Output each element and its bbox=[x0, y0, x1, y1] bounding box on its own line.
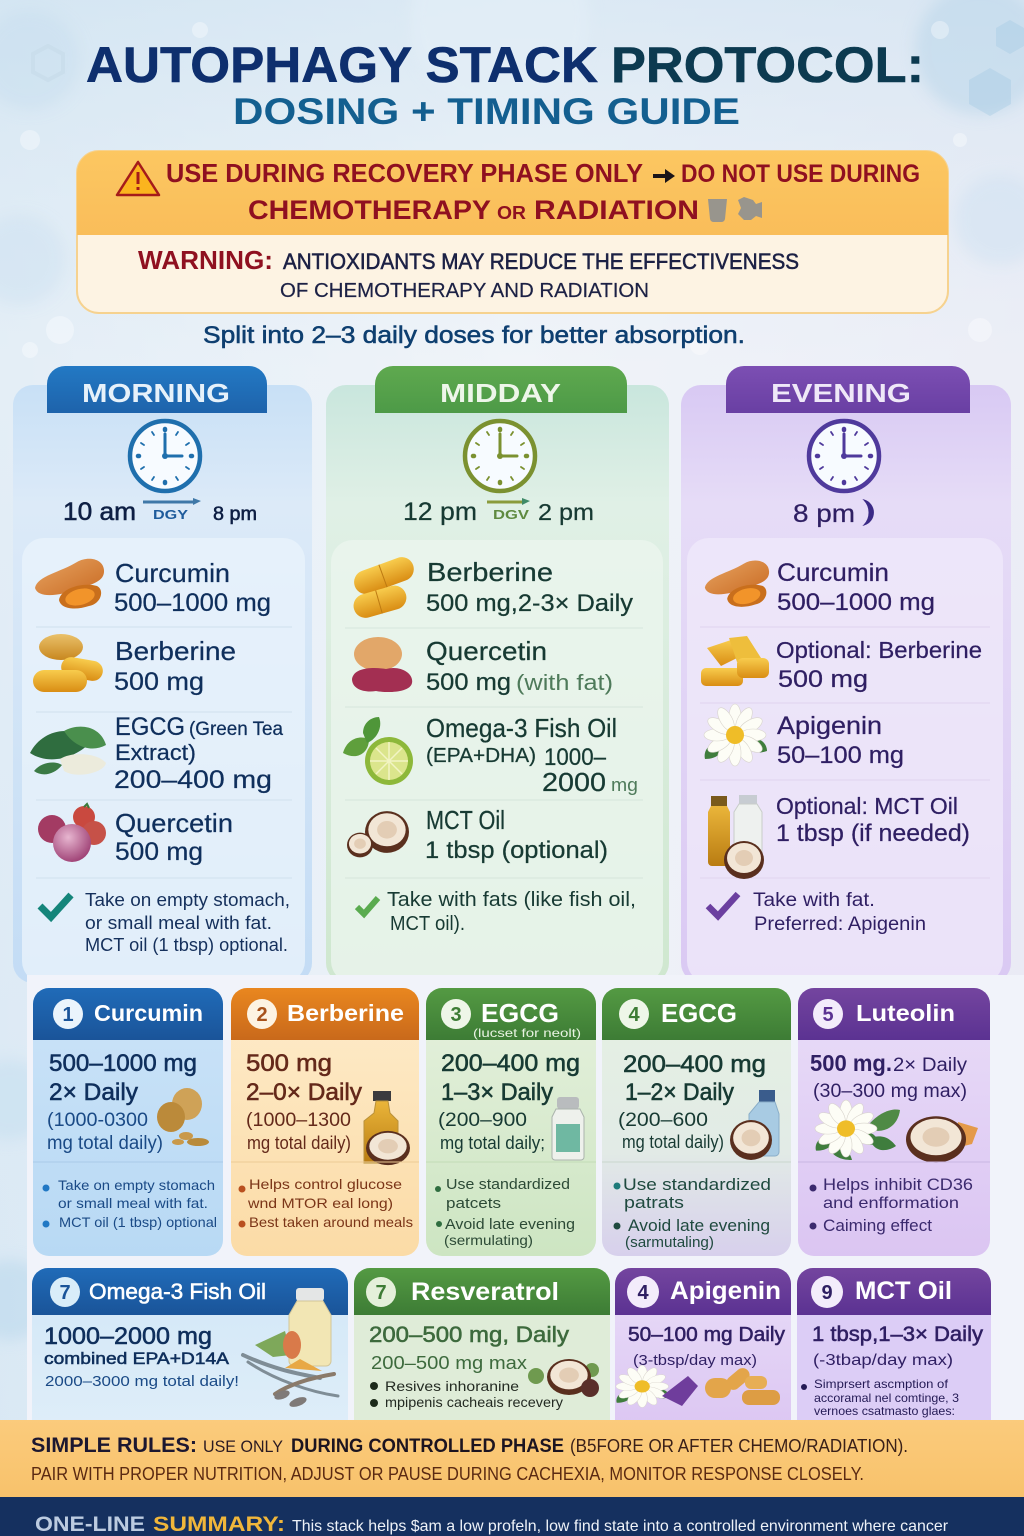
dose: 200–500 mg max bbox=[371, 1353, 527, 1373]
dose: mg total daily) bbox=[622, 1132, 724, 1152]
warning headline: DO NOT USE DURING bbox=[681, 160, 920, 188]
one-line summary band: SUMMARY: bbox=[153, 1513, 285, 1536]
warning banner bbox=[77, 151, 948, 313]
one-line summary band: This stack helps $am a low profeln, low find state into a controlled environment where cancer bbox=[292, 1518, 949, 1535]
evening time with moon: 8 pm bbox=[793, 500, 855, 528]
card title: Luteolin bbox=[856, 1000, 955, 1026]
midday instructions: MCT oil). bbox=[390, 913, 465, 935]
item: quercetin bbox=[115, 808, 233, 866]
warning headline: RADIATION bbox=[534, 195, 699, 225]
icon: morning clock bbox=[130, 421, 200, 491]
badge 5: 5 bbox=[822, 1004, 834, 1026]
title bbox=[86, 37, 924, 132]
panel: evening bbox=[681, 366, 1011, 983]
card: curcumin bbox=[33, 988, 223, 1256]
item: berberine: Berberine bbox=[427, 557, 553, 587]
badge 7: 7 bbox=[59, 1282, 71, 1304]
icon: midday clock bbox=[465, 421, 535, 491]
warning text bbox=[138, 245, 799, 302]
warning headline: OR bbox=[497, 203, 526, 223]
notes: Use standardized bbox=[446, 1176, 570, 1193]
badge 1 bbox=[53, 999, 83, 1029]
icon: coconut bbox=[347, 811, 409, 857]
dose: mg total daily) bbox=[247, 1133, 351, 1153]
item: curcumin: Curcumin bbox=[777, 559, 889, 587]
badge 2 bbox=[247, 999, 277, 1029]
badge 4: 4 bbox=[637, 1282, 649, 1304]
notes: Caiming effect bbox=[823, 1216, 932, 1235]
item: egcg: 200–400 mg bbox=[114, 766, 272, 794]
notes: or small meal with fat. bbox=[58, 1195, 208, 1211]
morning instructions: Take on empty stomach, bbox=[85, 890, 290, 910]
dose: (1000-0300 bbox=[47, 1110, 148, 1131]
icon: lime and leaves bbox=[343, 717, 413, 785]
notes bbox=[238, 1176, 413, 1230]
notes: MCT oil (1 tbsp) optional bbox=[59, 1214, 217, 1230]
dose: 200–400 mg bbox=[441, 1050, 580, 1077]
icon: quercetin bean bbox=[352, 637, 412, 692]
morning time range: 8 pm bbox=[213, 504, 257, 525]
card title: Resveratrol bbox=[411, 1278, 559, 1306]
dose bbox=[369, 1322, 569, 1373]
dose: (30–300 mg max) bbox=[813, 1081, 967, 1102]
item: curcumin bbox=[777, 559, 935, 616]
notes bbox=[435, 1176, 575, 1248]
notes: Helps control glucose bbox=[249, 1176, 402, 1192]
badge 3: 3 bbox=[450, 1004, 462, 1026]
card title: MCT Oil bbox=[855, 1277, 952, 1305]
item: optional mct oil bbox=[776, 793, 970, 847]
notes bbox=[42, 1177, 217, 1230]
badge 9: 9 bbox=[821, 1282, 833, 1304]
notes: and enfformation bbox=[823, 1195, 959, 1212]
notes: (sarmutaling) bbox=[625, 1234, 714, 1251]
card title: Apigenin bbox=[670, 1277, 781, 1305]
item: quercetin: Quercetin bbox=[426, 636, 547, 666]
item: omega-3 bbox=[426, 713, 638, 797]
dose: combined EPA+D14A bbox=[44, 1349, 230, 1368]
item: berberine bbox=[426, 557, 633, 617]
dose: 2000–3000 mg total daily! bbox=[45, 1373, 239, 1390]
item: apigenin: 50–100 mg bbox=[777, 742, 904, 769]
icon: turmeric bbox=[705, 561, 769, 607]
badge 7 bbox=[366, 1277, 396, 1307]
dose: 1–2× Daily bbox=[625, 1079, 734, 1106]
item: omega-3: 2000 bbox=[542, 767, 606, 797]
icon: coconut and peel bbox=[906, 1116, 978, 1163]
notes: Take on empty stomach bbox=[58, 1177, 215, 1193]
evening instructions: Take with fat. bbox=[753, 890, 875, 911]
item: berberine bbox=[114, 636, 236, 696]
icon: oil bottle and coconut bbox=[364, 1091, 410, 1165]
warning text: WARNING: bbox=[138, 245, 273, 275]
card: egcg powder bbox=[602, 988, 791, 1256]
dose: 500 mg bbox=[246, 1050, 332, 1077]
card: omega-3 fish oil bbox=[32, 1268, 348, 1438]
evening time with moon bbox=[793, 500, 873, 528]
item: omega-3: mg bbox=[611, 775, 638, 795]
icon: chemo cup and radiation device bbox=[708, 197, 762, 222]
notes: Helps inhibit CD36 bbox=[823, 1175, 973, 1194]
item: mct oil: MCT Oil bbox=[426, 805, 505, 835]
morning tab: MORNING bbox=[82, 378, 230, 408]
notes: Avoid late evening bbox=[628, 1216, 770, 1235]
supplement section backdrop bbox=[27, 975, 1024, 1421]
notes: (sermulating) bbox=[444, 1232, 533, 1248]
card title: Berberine bbox=[287, 1000, 404, 1026]
notes: Resives inhoranine bbox=[385, 1378, 519, 1394]
item: mct oil: 1 tbsp (optional) bbox=[425, 837, 608, 864]
item: quercetin: (with fat) bbox=[516, 670, 613, 695]
morning instructions: MCT oil (1 tbsp) optional. bbox=[85, 935, 288, 955]
notes: patcets bbox=[446, 1195, 501, 1212]
dose bbox=[438, 1050, 580, 1153]
icon: fish and citrus bbox=[243, 1331, 338, 1409]
icon: chamomile flower bbox=[704, 704, 767, 766]
card title bbox=[473, 998, 581, 1040]
card: egcg capsule bbox=[426, 988, 596, 1256]
notes: mpipenis cacheais recevery bbox=[385, 1394, 563, 1410]
icon: green check bbox=[357, 898, 378, 914]
card title: Omega-3 Fish Oil bbox=[89, 1279, 266, 1304]
panel: morning bbox=[13, 366, 312, 983]
icon: purple check bbox=[708, 894, 738, 916]
warning headline: USE DURING RECOVERY PHASE ONLY bbox=[166, 158, 643, 188]
dose: 50–100 mg Daily bbox=[628, 1324, 785, 1346]
dose: 2× Daily bbox=[49, 1079, 138, 1106]
midday tab: MIDDAY bbox=[440, 378, 561, 408]
badge 4 bbox=[619, 999, 649, 1029]
dose bbox=[47, 1050, 197, 1154]
simple rules band: (B5FORE OR AFTER CHEMO/RADIATION). bbox=[570, 1436, 908, 1456]
simple rules band bbox=[0, 1420, 1024, 1497]
item: berberine: 500 mg bbox=[114, 668, 204, 696]
midday time range bbox=[403, 498, 594, 526]
card title: Curcumin bbox=[94, 1000, 203, 1026]
icon: curcumin nuggets bbox=[157, 1088, 209, 1146]
midday time range: DGV bbox=[493, 507, 529, 522]
item: optional mct oil: 1 tbsp (if needed) bbox=[776, 820, 970, 847]
dose bbox=[628, 1324, 785, 1369]
icon: evening clock bbox=[809, 421, 879, 491]
panel: midday bbox=[326, 366, 669, 983]
icon: flower bbox=[815, 1100, 900, 1160]
dose: (1000–1300 bbox=[246, 1110, 351, 1131]
icon: flower and roots bbox=[616, 1365, 780, 1407]
item: quercetin: 500 mg bbox=[115, 838, 203, 866]
item: quercetin: 500 mg bbox=[426, 669, 511, 696]
item: curcumin bbox=[114, 558, 271, 617]
icon: blue bottle and coconut bbox=[730, 1090, 779, 1160]
card: mct oil bbox=[797, 1268, 991, 1438]
dose: mg total daily; bbox=[440, 1133, 545, 1153]
dose: 500–1000 mg bbox=[49, 1050, 197, 1077]
item: apigenin: Apigenin bbox=[777, 712, 882, 740]
icon: berberine bbox=[33, 634, 104, 692]
badge 7 bbox=[50, 1277, 80, 1307]
item: curcumin: 500–1000 mg bbox=[777, 589, 935, 616]
dose: 1–3× Daily bbox=[441, 1079, 553, 1106]
item: egcg: Extract) bbox=[115, 740, 196, 765]
card title: (lucset for neolt) bbox=[473, 1026, 581, 1040]
dose: (200–600 bbox=[618, 1110, 708, 1131]
card: apigenin bbox=[615, 1268, 791, 1438]
dose bbox=[810, 1050, 968, 1102]
evening instructions: Preferred: Apigenin bbox=[754, 914, 926, 935]
icon: onions bbox=[38, 804, 106, 862]
dosing note: Split into 2–3 daily doses for better absorption. bbox=[203, 322, 745, 349]
morning time range bbox=[63, 498, 257, 526]
icon: fish oil bottle bbox=[289, 1288, 331, 1366]
notes: Simprsert ascmption of bbox=[814, 1377, 949, 1391]
dose bbox=[44, 1323, 239, 1390]
simple rules band: USE ONLY bbox=[203, 1437, 283, 1456]
title: AUTOPHAGY STACK bbox=[86, 37, 598, 93]
warning text: OF CHEMOTHERAPY AND RADIATION bbox=[280, 280, 649, 302]
icon: white bottle bbox=[552, 1097, 584, 1160]
notes: wnd MTOR eal long) bbox=[247, 1195, 393, 1211]
evening tab bbox=[726, 366, 970, 413]
notes: Avoid late evening bbox=[445, 1216, 575, 1233]
item: optional berberine: 500 mg bbox=[778, 666, 868, 693]
icon: teal check bbox=[40, 895, 71, 917]
badge 5 bbox=[813, 999, 843, 1029]
item: optional berberine bbox=[776, 637, 982, 693]
dose: 2–0× Daily bbox=[246, 1079, 362, 1106]
dose: 2× Daily bbox=[893, 1055, 968, 1076]
midday instructions bbox=[387, 889, 636, 935]
badge 3 bbox=[441, 999, 471, 1029]
item: egcg: EGCG bbox=[115, 713, 185, 741]
item: quercetin: Quercetin bbox=[115, 808, 233, 838]
card: resveratrol bbox=[354, 1268, 610, 1438]
icon: berberine chunks bbox=[701, 636, 769, 686]
item: mct oil bbox=[425, 805, 608, 864]
item: berberine: 500 mg,2-3× Daily bbox=[426, 590, 633, 617]
simple rules band: SIMPLE RULES: bbox=[31, 1434, 197, 1457]
notes: Best taken around meals bbox=[249, 1214, 413, 1230]
card: luteolin bbox=[798, 988, 990, 1256]
card title: EGCG bbox=[661, 998, 737, 1028]
evening tab: EVENING bbox=[771, 378, 911, 408]
dose: mg total daily) bbox=[47, 1133, 163, 1154]
dose: (-3tbap/day max) bbox=[813, 1352, 953, 1369]
notes bbox=[801, 1377, 959, 1418]
item: omega-3: 1000– bbox=[544, 744, 607, 771]
morning time range: 10 am bbox=[63, 498, 136, 526]
badge 1: 1 bbox=[62, 1004, 74, 1026]
notes bbox=[614, 1175, 771, 1251]
notes bbox=[810, 1175, 973, 1235]
dose: 1000–2000 mg bbox=[44, 1323, 212, 1350]
badge 4: 4 bbox=[628, 1004, 640, 1026]
item: omega-3: (EPA+DHA) bbox=[426, 745, 536, 767]
icon: capsules bbox=[351, 554, 417, 621]
item: egcg bbox=[114, 713, 283, 794]
dose: (200–900 bbox=[438, 1110, 527, 1131]
dose: 200–500 mg, Daily bbox=[369, 1322, 569, 1347]
warning text: ANTIOXIDANTS MAY REDUCE THE EFFECTIVENESS bbox=[283, 249, 799, 274]
item: curcumin: 500–1000 mg bbox=[114, 589, 271, 617]
icon: coconut with herbs bbox=[528, 1359, 599, 1397]
badge 4 bbox=[627, 1276, 659, 1308]
badge 2: 2 bbox=[256, 1004, 268, 1026]
morning tab bbox=[47, 366, 267, 413]
simple rules band: DURING CONTROLLED PHASE bbox=[291, 1436, 564, 1457]
midday time range: 2 pm bbox=[538, 499, 594, 525]
dose bbox=[246, 1050, 362, 1153]
dose bbox=[618, 1051, 766, 1152]
one-line summary band bbox=[0, 1497, 1024, 1536]
notes: Use standardized bbox=[623, 1175, 771, 1194]
morning time range: DGY bbox=[153, 507, 188, 522]
dose: 1 tbsp,1–3× Daily bbox=[812, 1323, 984, 1346]
one-line summary band: ONE-LINE bbox=[35, 1513, 145, 1536]
dose: (3-tbsp/day max) bbox=[633, 1352, 757, 1369]
icon: warning triangle bbox=[117, 162, 159, 195]
card title: EGCG bbox=[481, 998, 559, 1028]
morning instructions: or small meal with fat. bbox=[85, 913, 272, 933]
item: optional berberine: Optional: Berberine bbox=[776, 637, 982, 663]
simple rules band: PAIR WITH PROPER NUTRITION, ADJUST OR PAUSE DURING CACHEXIA, MONITOR RESPONSE CLOSELY. bbox=[31, 1464, 864, 1484]
item: curcumin: Curcumin bbox=[115, 558, 230, 588]
item: omega-3: Omega-3 Fish Oil bbox=[426, 713, 617, 743]
icon: mct oil bottles bbox=[708, 795, 764, 879]
icon: turmeric bbox=[35, 559, 104, 608]
badge 9 bbox=[811, 1276, 843, 1308]
title: PROTOCOL: bbox=[611, 37, 924, 93]
dose bbox=[812, 1323, 984, 1369]
notes: accoramal nel comtinge, 3 bbox=[814, 1391, 959, 1405]
midday time range: 12 pm bbox=[403, 498, 477, 526]
midday tab bbox=[375, 366, 627, 413]
dose: 500 mg. bbox=[810, 1050, 892, 1076]
item: optional mct oil: Optional: MCT Oil bbox=[776, 793, 958, 819]
warning headline bbox=[166, 158, 920, 225]
badge 7: 7 bbox=[375, 1282, 387, 1304]
warning headline: CHEMOTHERAPY bbox=[248, 195, 491, 225]
midday instructions: Take with fats (like fish oil, bbox=[387, 889, 636, 911]
notes bbox=[370, 1378, 563, 1410]
notes: patrats bbox=[624, 1193, 684, 1212]
notes: vernoes csatmasto glaes: bbox=[814, 1404, 955, 1418]
item: berberine: Berberine bbox=[115, 636, 236, 666]
card: berberine bbox=[231, 988, 419, 1256]
morning instructions bbox=[85, 890, 290, 955]
icon: green tea leaves bbox=[30, 727, 106, 775]
item: quercetin bbox=[426, 636, 613, 696]
title: DOSING + TIMING GUIDE bbox=[233, 91, 740, 132]
dose: 200–400 mg bbox=[623, 1051, 766, 1078]
item: egcg: (Green Tea bbox=[189, 719, 283, 740]
item: apigenin bbox=[777, 712, 904, 769]
evening instructions bbox=[753, 890, 926, 935]
